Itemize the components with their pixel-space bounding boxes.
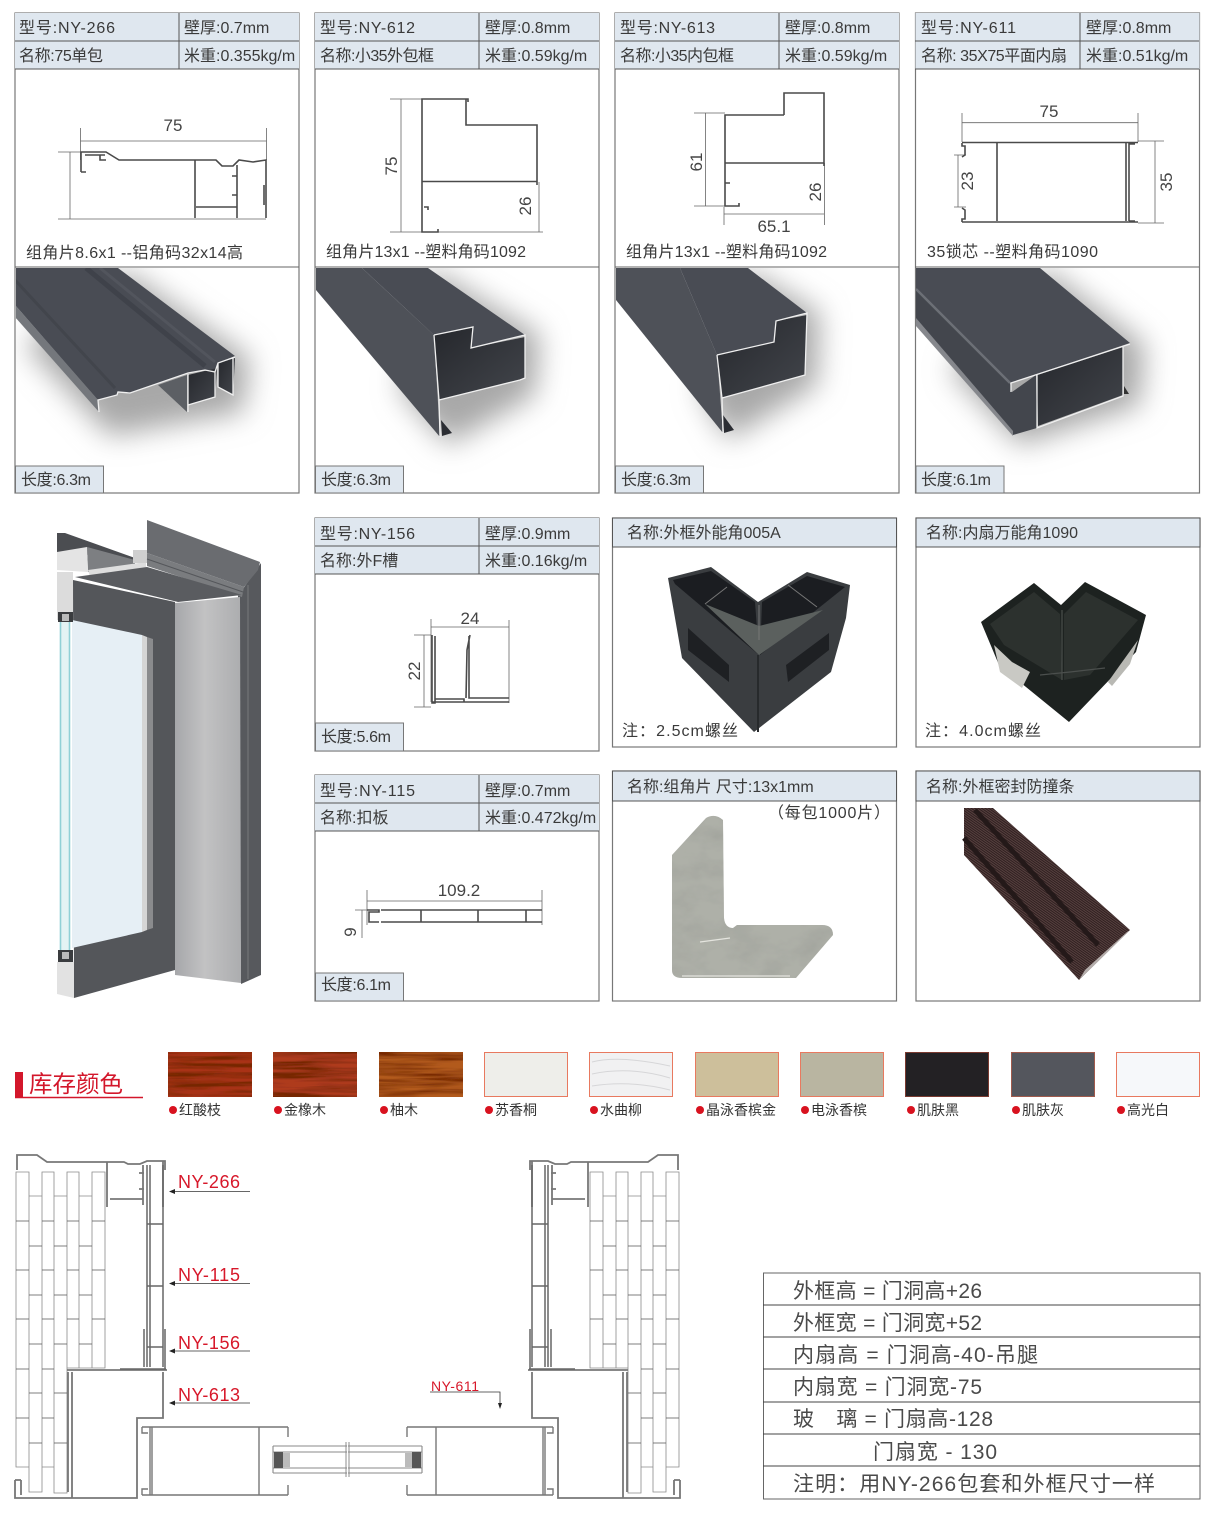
dark frame leaf xyxy=(73,580,175,998)
swatch: 肌肤灰: 肌肤灰 xyxy=(1022,1102,1064,1118)
profile drawing: NY-611: 23 xyxy=(958,172,977,190)
inner reveal panel xyxy=(175,597,241,983)
table: size formulas: 注明：用NY-266包套和外框尺寸一样 xyxy=(793,1473,1155,1496)
heading xyxy=(916,771,1200,801)
header: NY-611 specs: 米重:0.51kg/m xyxy=(1086,47,1188,65)
heading xyxy=(916,518,1200,547)
header: NY-115 specs: 米重:0.472kg/m xyxy=(485,809,596,827)
3D render: NY-611 xyxy=(916,268,1145,445)
callout: NY-115: NY-115 xyxy=(178,1265,240,1285)
profile drawing: NY-613 xyxy=(687,93,825,236)
profile drawing: NY-611: 75 xyxy=(1040,102,1058,121)
length box: 长度:6.3m xyxy=(321,471,391,489)
swatch: 红酸枝: 红酸枝 xyxy=(179,1102,221,1118)
length box: 长度:5.6m xyxy=(321,728,391,746)
bead stripe xyxy=(142,635,147,932)
profile drawing: NY-611: 35 xyxy=(1157,173,1176,191)
header: NY-613 specs: 壁厚:0.8mm xyxy=(785,18,870,37)
header: NY-612 specs: 壁厚:0.8mm xyxy=(485,18,570,37)
table: size formulas: 内扇高 = 门洞高-40-吊腿 xyxy=(793,1344,1038,1367)
lower gasket xyxy=(58,950,73,962)
profile drawing: NY-266: 75 xyxy=(164,116,182,135)
callout: NY-611 xyxy=(430,1378,502,1409)
header: NY-612 specs: 米重:0.59kg/m xyxy=(485,47,587,65)
length box xyxy=(316,466,404,493)
glass edge xyxy=(60,620,70,950)
length box xyxy=(16,466,104,493)
fitting caption: 35锁芯 --塑料角码1090 xyxy=(927,243,1098,261)
casing rib band xyxy=(147,553,244,597)
swatch: 肌肤黑 xyxy=(906,1052,988,1118)
heading: stock colours: 库存颜色 xyxy=(29,1071,123,1097)
back top profile xyxy=(57,533,135,566)
profile drawing: NY-613: 65.1 xyxy=(757,217,791,236)
callout: NY-611: NY-611 xyxy=(431,1378,479,1394)
length box: 长度:6.3m xyxy=(21,471,91,489)
profile drawing: NY-156: 24 xyxy=(461,609,479,628)
panel: corner 005A xyxy=(612,518,896,747)
photo: corner connector 1090 xyxy=(981,582,1146,722)
swatch: 苏香桐 xyxy=(484,1052,568,1118)
header: NY-611 specs xyxy=(915,13,1200,69)
header: NY-612 specs xyxy=(315,13,599,69)
white profile block xyxy=(57,547,88,572)
swatch: 柚木: 柚木 xyxy=(390,1102,418,1118)
length box xyxy=(316,973,404,1001)
3D render: NY-266 xyxy=(15,268,250,436)
table: size formulas: 外框高 = 门洞高+26 xyxy=(793,1280,982,1303)
3D render: NY-613 xyxy=(616,268,820,440)
profile drawing: NY-611 xyxy=(954,102,1176,223)
profile drawing: NY-612: 75 xyxy=(382,157,401,175)
callout: NY-613: NY-613 xyxy=(178,1385,240,1405)
length box: 长度:6.1m xyxy=(921,471,991,489)
casing outer stripe xyxy=(238,563,261,984)
header: NY-115 specs: 名称:扣板 xyxy=(320,809,388,827)
length box xyxy=(316,723,404,751)
swatch: 高光白: 高光白 xyxy=(1127,1102,1169,1118)
header: NY-266 specs xyxy=(15,13,299,69)
panel: NY-266 xyxy=(15,13,299,493)
header: NY-612 specs: 名称:小35外包框 xyxy=(320,47,434,65)
photo: corner connector 005A xyxy=(668,567,850,732)
swatch: 晶泳香槟金 xyxy=(696,1052,778,1118)
3D render: NY-612 xyxy=(316,268,540,445)
swatch: 金橡木 xyxy=(273,1052,357,1118)
panel: NY-613 xyxy=(615,13,899,493)
header: NY-613 specs xyxy=(615,13,899,69)
window glass xyxy=(72,620,142,948)
note: 注：2.5cm螺丝 xyxy=(622,722,738,740)
header: NY-156 specs: 型号:NY-156 xyxy=(320,525,415,543)
profile drawing: NY-115: 109.2 xyxy=(438,881,480,900)
length box: 长度:6.3m xyxy=(621,471,691,489)
header: NY-611 specs: 型号:NY-611 xyxy=(921,19,1016,37)
header: NY-613 specs: 米重:0.59kg/m xyxy=(785,47,887,65)
header: NY-611 specs: 名称: 35X75平面内扇 xyxy=(921,47,1067,65)
section drawing: left frame xyxy=(15,1155,349,1498)
profile drawing: NY-156 xyxy=(405,609,509,707)
swatch: 肌肤灰 xyxy=(1012,1052,1094,1118)
profile drawing: NY-613: 61 xyxy=(687,153,706,171)
panel: NY-115 xyxy=(315,775,599,1001)
profile drawing: NY-612: 26 xyxy=(516,197,535,215)
table: size formulas: 门扇宽 - 130 xyxy=(873,1441,997,1464)
profile drawing: NY-266 xyxy=(58,116,266,219)
white rib strip xyxy=(88,562,146,577)
heading xyxy=(612,771,896,801)
fitting caption: 组角片13x1 --塑料角码1092 xyxy=(626,243,827,261)
length box xyxy=(616,466,704,493)
profile drawing: NY-115: 9 xyxy=(341,927,360,937)
left white profile sides xyxy=(57,572,73,620)
panel: NY-612 xyxy=(315,13,599,493)
swatch: 高光白 xyxy=(1116,1052,1200,1118)
table: size formulas: 外框宽 = 门洞宽+52 xyxy=(793,1312,982,1335)
header: NY-266 specs: 壁厚:0.7mm xyxy=(184,18,269,37)
swatch: 电泳香槟 xyxy=(800,1052,884,1118)
gaskets xyxy=(58,612,73,622)
swatch: 晶泳香槟金: 晶泳香槟金 xyxy=(706,1102,776,1118)
panel: corner 1090 xyxy=(916,518,1200,747)
header: NY-115 specs: 壁厚:0.7mm xyxy=(485,781,570,800)
swatch: 肌肤黑: 肌肤黑 xyxy=(917,1102,959,1118)
panel: NY-611 xyxy=(915,13,1200,493)
header: NY-156 specs: 米重:0.16kg/m xyxy=(485,552,587,570)
table: size formulas xyxy=(763,1273,1200,1499)
heading: 名称:外框密封防撞条 xyxy=(926,778,1074,796)
swatch: 水曲柳 xyxy=(590,1052,672,1118)
swatch: 电泳香槟: 电泳香槟 xyxy=(811,1102,867,1118)
callout: NY-266: NY-266 xyxy=(178,1172,240,1192)
soffit xyxy=(75,567,242,602)
photo: sealing strip xyxy=(964,808,1130,980)
table: size formulas: 玻 璃 = 门扇高-128 xyxy=(793,1408,993,1431)
callout: NY-266 xyxy=(169,1172,250,1194)
illustration: door corner assembly xyxy=(57,520,261,998)
header: NY-266 specs: 米重:0.355kg/m xyxy=(184,47,295,65)
profile drawing: NY-156: 22 xyxy=(405,662,424,680)
section drawing: right frame xyxy=(346,1155,680,1498)
heading: 名称:内扇万能角1090 xyxy=(926,524,1078,542)
section: stock colours xyxy=(15,1052,1200,1118)
heading: 名称:组角片 尺寸:13x1mm xyxy=(627,778,814,796)
panel: corner plate xyxy=(612,771,896,1001)
panel: NY-156 xyxy=(315,518,599,751)
photo: corner plate xyxy=(672,816,833,978)
header: NY-266 specs: 型号:NY-266 xyxy=(19,19,115,37)
header: NY-156 specs: 名称:外F槽 xyxy=(320,552,398,570)
panel: sealing strip xyxy=(916,771,1200,1001)
profile drawing: NY-115 xyxy=(341,881,542,938)
header: NY-156 specs xyxy=(315,518,599,574)
fitting caption: 组角片13x1 --塑料角码1092 xyxy=(326,243,526,261)
header: NY-115 specs: 型号:NY-115 xyxy=(320,782,415,800)
profile drawing: NY-613: 26 xyxy=(806,183,825,201)
header: NY-613 specs: 名称:小35内包框 xyxy=(620,47,734,65)
swatch: 金橡木: 金橡木 xyxy=(284,1102,326,1118)
header: NY-156 specs: 壁厚:0.9mm xyxy=(485,524,570,543)
note: 注：4.0cm螺丝 xyxy=(925,722,1041,740)
casing top face xyxy=(147,520,260,587)
header: NY-266 specs: 名称:75单包 xyxy=(19,47,103,65)
header: NY-115 specs xyxy=(315,775,599,831)
heading: 名称:外框外能角005A xyxy=(627,524,781,542)
swatch: 苏香桐: 苏香桐 xyxy=(495,1102,537,1118)
callout: NY-156: NY-156 xyxy=(178,1333,240,1353)
swatch: 柚木 xyxy=(379,1052,463,1118)
length box xyxy=(916,466,1004,493)
length box: 长度:6.1m xyxy=(321,976,391,994)
header: NY-611 specs: 壁厚:0.8mm xyxy=(1086,18,1171,37)
swatch: 水曲柳: 水曲柳 xyxy=(600,1102,642,1118)
table: size formulas: 内扇宽 = 门洞宽-75 xyxy=(793,1376,982,1399)
package note: （每包1000片） xyxy=(768,804,890,822)
heading xyxy=(612,518,896,547)
header: NY-613 specs: 型号:NY-613 xyxy=(620,19,715,37)
fitting caption: 组角片8.6x1 --铝角码32x14高 xyxy=(26,244,243,262)
header: NY-612 specs: 型号:NY-612 xyxy=(320,19,415,37)
swatch: 红酸枝 xyxy=(168,1052,252,1118)
profile drawing: NY-612 xyxy=(382,99,543,232)
